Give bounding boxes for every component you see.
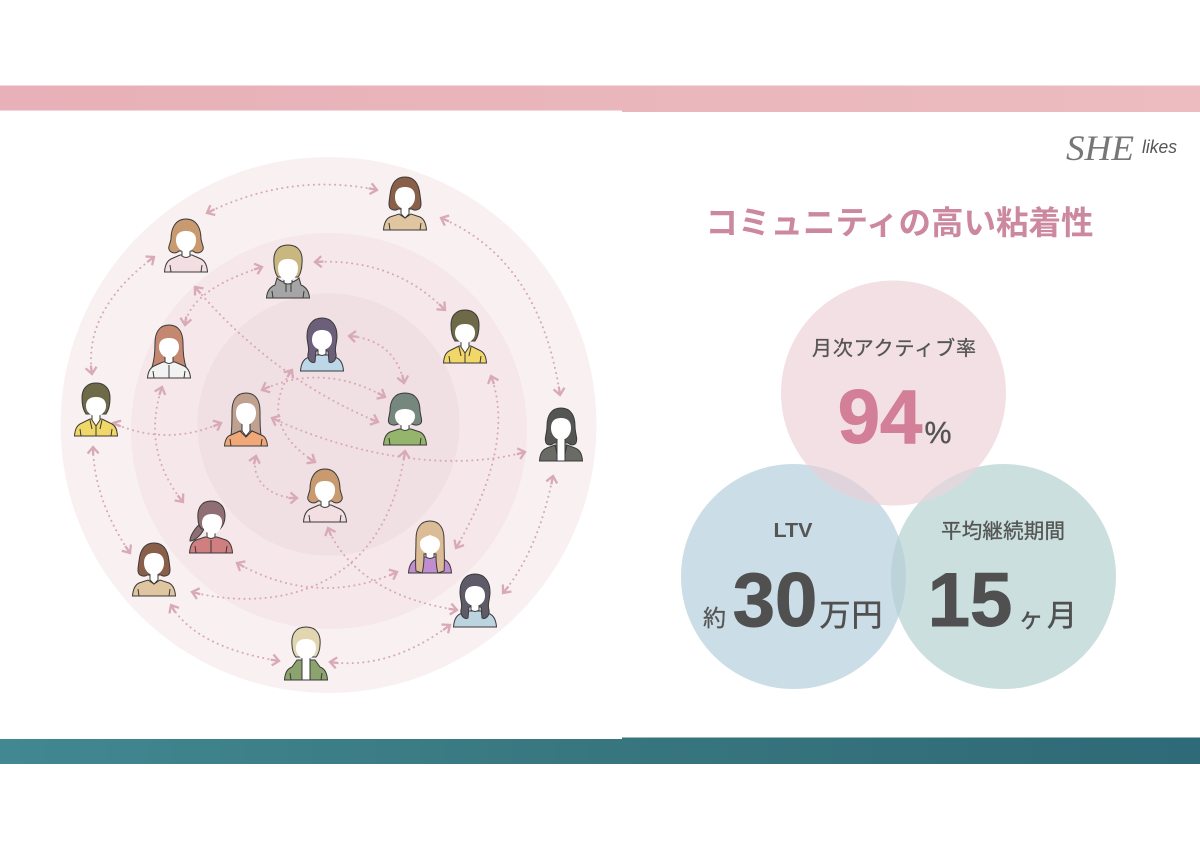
- arrow: orange to jacket: [272, 418, 525, 461]
- person: dark jacket: [540, 408, 582, 461]
- arrow: orange to pink center: [255, 456, 297, 498]
- arrow: tan lower to green bob: [192, 451, 405, 599]
- arrow: diagonal to green bob: [195, 287, 378, 422]
- arrow: tan top to jacket: [441, 218, 560, 395]
- KPI: LTV: [703, 520, 882, 643]
- KPI: LTV: 万円: [820, 598, 882, 633]
- person: yellow shirt left: [74, 383, 118, 436]
- arrow: green bob to purple: [349, 336, 404, 383]
- title: コミュニティの高い粘着性: [705, 205, 1094, 241]
- arrow: auburn to ponytail: [155, 387, 183, 502]
- arrow: green blond to tan lower: [171, 605, 279, 661]
- arrow: yellow right to blond: [456, 376, 498, 548]
- arrow: purple to pink center: [278, 370, 315, 462]
- person: auburn hair white shirt: [148, 325, 190, 378]
- logo: SHE likes: SHE: [1066, 128, 1134, 168]
- KPI: LTV: 30: [733, 558, 817, 643]
- person: yellow shirt right: [444, 310, 486, 363]
- dotted relationship arrows: [91, 185, 560, 663]
- arrow: pink top to tan top: [207, 185, 377, 213]
- person: blond long hair purple top: [408, 521, 452, 573]
- arrow: hoodie to auburn: [185, 267, 262, 325]
- person: purple hair blue top: [300, 318, 344, 371]
- logo: SHE likes: likes: [1142, 137, 1177, 157]
- KPI: average retention: ヶ: [1018, 605, 1044, 633]
- person: pink top center: [304, 469, 346, 522]
- person: orange top long hair: [224, 393, 268, 446]
- arrow: jacket to dark hair: [503, 476, 553, 593]
- community concentric circles: [60, 157, 596, 693]
- arrow: orange to green bob: [262, 378, 385, 397]
- person: tan top brown bob lower: [132, 543, 176, 596]
- KPI: LTV: LTV: [774, 520, 813, 542]
- KPI: monthly active rate: [812, 336, 976, 460]
- bottom teal band: [0, 738, 1200, 764]
- person: tan top brown bob upper: [384, 177, 426, 230]
- KPI: average retention: 月: [1047, 600, 1077, 633]
- person: pink top brown bob: [164, 219, 208, 272]
- logo: SHE likes: [1066, 128, 1177, 168]
- arrow: pink center to dark hair: [328, 528, 457, 610]
- KPI: average retention: 平均継続期間: [941, 520, 1065, 543]
- person: green top grey bob: [384, 393, 426, 445]
- person: grey hoodie: [266, 245, 310, 298]
- person: ponytail red top: [190, 501, 232, 553]
- arrow: yellow to orange: [113, 423, 221, 435]
- arrow: ponytail to blond: [237, 563, 397, 588]
- top pink band: [0, 86, 1200, 112]
- KPI: monthly active rate: %: [924, 415, 952, 450]
- arrow: tan lower to yellow: [93, 447, 130, 553]
- person: green jacket blond: [284, 627, 328, 680]
- KPI: average retention: 15: [928, 558, 1012, 643]
- KPI: average retention: [928, 520, 1077, 643]
- KPI: monthly active rate: 94: [838, 375, 922, 460]
- arrow: hoodie to yellow right: [315, 262, 445, 310]
- panel: KPI circles: [681, 280, 1116, 689]
- arrow: dark hair to green blond: [330, 625, 450, 663]
- arrow: yellow to pink top: [91, 257, 154, 374]
- KPI: LTV: 約: [703, 605, 726, 631]
- person: dark hair blue top: [454, 574, 496, 627]
- KPI: monthly active rate: 月次アクティブ率: [812, 336, 976, 360]
